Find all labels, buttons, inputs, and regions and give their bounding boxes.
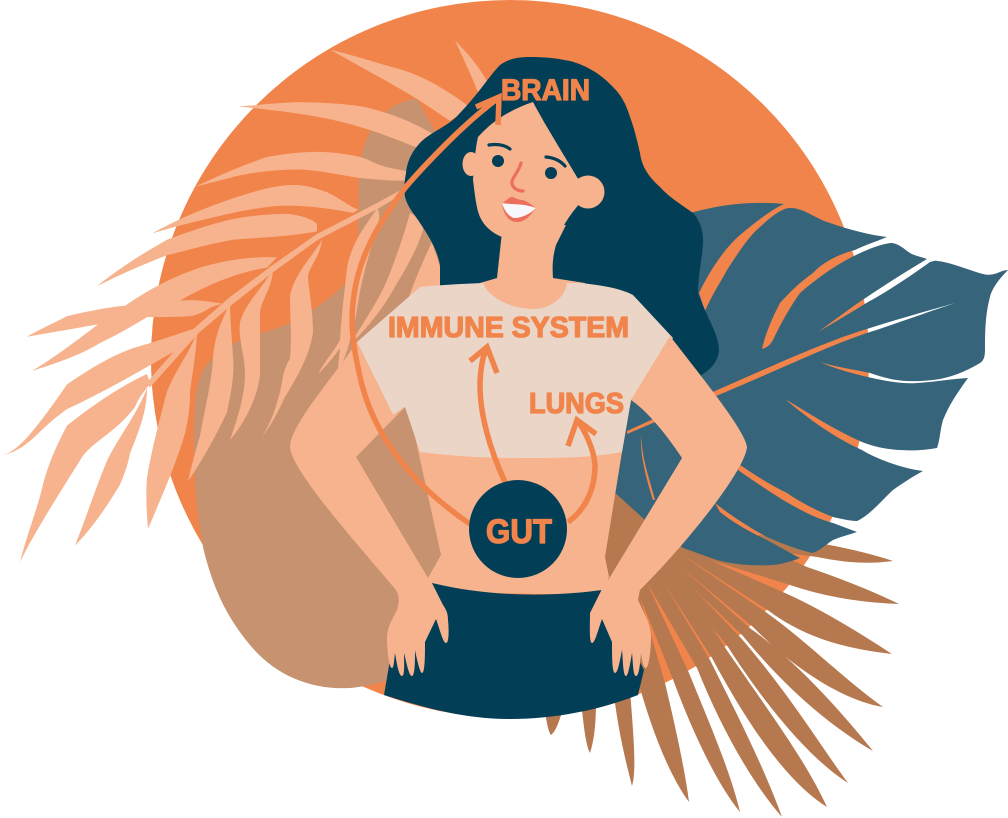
eyes [492, 155, 557, 179]
right arm and hand [590, 336, 747, 676]
shirt [357, 283, 673, 458]
teeth [502, 203, 536, 218]
arms and hands [290, 336, 747, 676]
label: lungs: LUNGS [529, 388, 624, 420]
arrow: gut to brain [352, 97, 499, 524]
fern fronds lower [20, 374, 150, 562]
background orange circle [151, 0, 869, 718]
peach fern leaf [0, 40, 490, 562]
main fan blades [600, 492, 899, 817]
fern fronds upper [330, 50, 470, 121]
skirt [384, 583, 644, 719]
label: immune system: IMMUNE SYSTEM [388, 312, 629, 344]
tan blob behind figure [194, 99, 470, 688]
left ear [462, 152, 480, 176]
small palm blades behind skirt [545, 690, 634, 786]
neck and torso [405, 225, 631, 595]
face [473, 102, 580, 241]
fern stem [146, 185, 412, 387]
label: brain: BRAIN [501, 74, 590, 107]
label: gut: GUT [486, 513, 552, 551]
lips [502, 197, 536, 222]
facial features [489, 144, 565, 222]
eyebrows [489, 144, 565, 166]
gut circle [469, 480, 567, 578]
blue monstera leaf [612, 203, 1008, 565]
nose [512, 163, 523, 191]
left arm and hand [290, 342, 449, 676]
brown fan palm leaf [545, 492, 899, 817]
arrow: gut to immune system [470, 347, 505, 482]
right ear [572, 176, 604, 208]
hair [404, 57, 719, 380]
arrow: gut to lungs [568, 420, 596, 522]
figure head and torso [405, 102, 631, 595]
